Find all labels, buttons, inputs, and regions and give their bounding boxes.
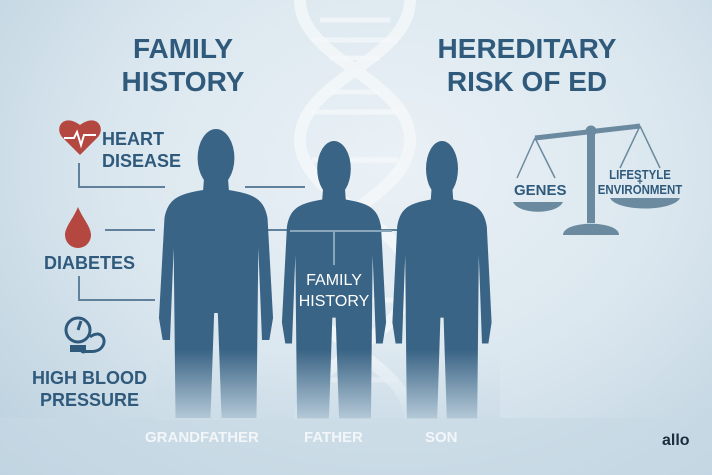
labels: generations: FATHER xyxy=(304,429,363,446)
text: heart disease: HEART xyxy=(102,129,164,149)
title: hereditary risk of ED: HEREDITARY xyxy=(438,33,616,64)
title: family history xyxy=(122,33,244,97)
text: lifestyle + environment xyxy=(598,167,682,197)
text: high blood pressure: PRESSURE xyxy=(40,390,139,410)
icon: heart xyxy=(59,120,101,155)
title: hereditary risk of ED xyxy=(438,33,616,97)
title: family history: HISTORY xyxy=(122,66,244,97)
labels: generations: GRANDFATHER xyxy=(145,429,259,446)
text: family history on father: HISTORY xyxy=(299,293,369,310)
title: family history: FAMILY xyxy=(133,33,233,64)
text: lifestyle + environment: ENVIRONMENT xyxy=(598,182,682,197)
person: son xyxy=(392,141,492,418)
icon: blood pressure gauge xyxy=(64,316,106,354)
person: father xyxy=(282,141,386,418)
text: lifestyle + environment: LIFESTYLE xyxy=(609,167,671,182)
text: heart disease xyxy=(102,129,181,171)
labels: generations: SON xyxy=(425,429,458,446)
text: diabetes: DIABETES xyxy=(44,253,135,273)
logo: allo: allo xyxy=(662,432,690,449)
text: genes: GENES xyxy=(514,182,567,199)
text: heart disease: DISEASE xyxy=(102,151,181,171)
text: high blood pressure: HIGH BLOOD xyxy=(32,368,147,388)
text: lifestyle + environment: + xyxy=(637,176,643,188)
title: hereditary risk of ED: RISK OF ED xyxy=(447,66,607,97)
person: grandfather xyxy=(159,129,273,418)
icon: blood drop xyxy=(65,207,91,248)
scale: genes vs lifestyle xyxy=(513,124,680,235)
labels: generations xyxy=(145,429,458,446)
text: family history on father: FAMILY xyxy=(306,272,362,289)
text: family history on father xyxy=(299,272,369,310)
text: high blood pressure xyxy=(32,368,147,410)
